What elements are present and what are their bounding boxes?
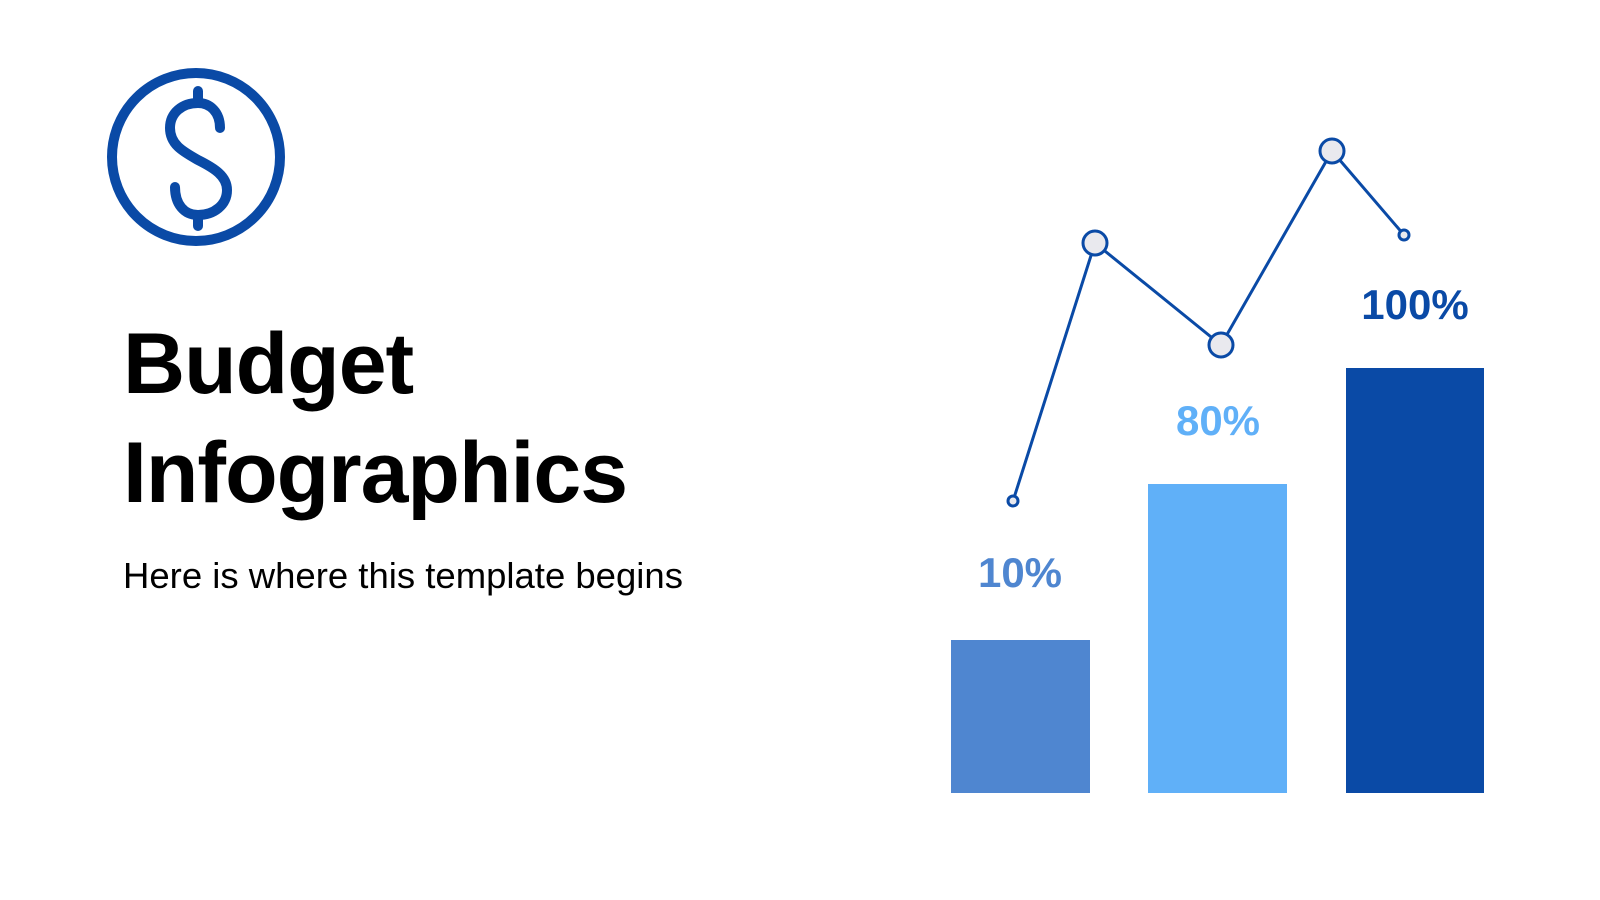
icon: dollar in circle xyxy=(107,68,285,246)
title xyxy=(123,316,627,521)
subtitle: Here is where this template begins xyxy=(123,555,683,596)
line chart xyxy=(1008,139,1409,506)
bar: 80%: 80% xyxy=(1176,397,1260,444)
bar: 80% xyxy=(1148,397,1287,793)
bar: 10% xyxy=(951,549,1090,793)
title: Infographics xyxy=(123,425,627,521)
bar: 10%: 10% xyxy=(978,549,1062,596)
bar: 100%: 100% xyxy=(1361,281,1469,328)
bar: 100% xyxy=(1346,281,1484,793)
title: Budget xyxy=(123,316,413,412)
